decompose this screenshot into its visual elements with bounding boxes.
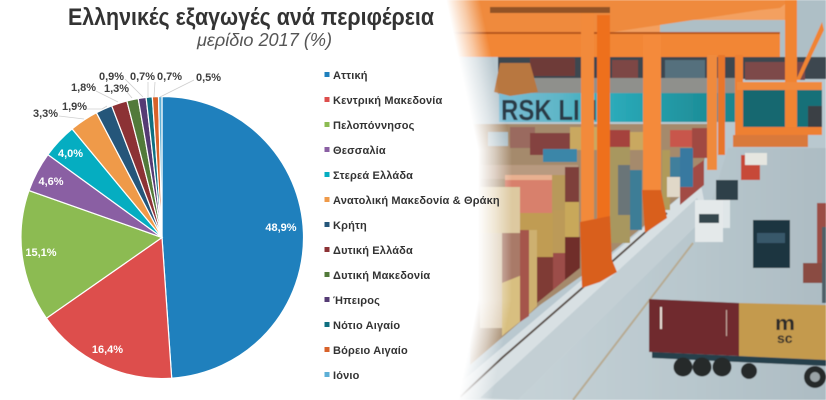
legend: Ήπειρος xyxy=(333,295,380,307)
pie labels inside: 48,9% xyxy=(265,222,297,234)
spreader xyxy=(494,63,538,96)
pie labels inside: 16,4% xyxy=(92,344,123,356)
pie labels outside: 1,9% xyxy=(62,101,87,113)
trailer with containers xyxy=(649,299,739,356)
walkway and fence xyxy=(468,187,704,400)
legend: Βόρειο Αιγαίο xyxy=(333,345,408,357)
pie labels outside: 0,5% xyxy=(196,72,221,84)
legend: Στερεά Ελλάδα xyxy=(333,170,413,182)
sky and upper frame xyxy=(614,4,786,33)
legend xyxy=(324,70,500,382)
legend: Πελοπόννησος xyxy=(333,120,415,132)
pie labels inside: 4,6% xyxy=(38,176,64,188)
ship containers xyxy=(498,57,826,79)
photo: container port with cranes and trucks: m xyxy=(775,313,795,335)
legend: Κρήτη xyxy=(333,220,367,232)
pie labels outside: 1,8% xyxy=(71,82,96,94)
title: Ελληνικές εξαγωγές ανά περιφέρεια xyxy=(68,4,434,31)
pie labels outside: 1,3% xyxy=(104,83,129,95)
legend: Ανατολική Μακεδονία & Θράκη xyxy=(333,195,500,207)
container stacks xyxy=(470,124,712,365)
pie labels inside: 15,1% xyxy=(25,247,57,259)
crane columns xyxy=(581,13,594,228)
pie labels outside: 0,9% xyxy=(99,71,124,83)
crane beams xyxy=(430,0,790,32)
pie labels outside: 0,7% xyxy=(130,71,155,83)
legend: Δυτική Μακεδονία xyxy=(333,270,430,282)
trucks xyxy=(741,155,760,180)
ground xyxy=(518,148,826,400)
ship hull xyxy=(499,93,735,122)
pie leader lines xyxy=(59,79,194,119)
pie labels outside: 0,7% xyxy=(157,71,182,83)
pie chart: export share by region xyxy=(21,96,304,379)
legend: Νότιο Αιγαίο xyxy=(333,320,400,332)
photo: container port with cranes and trucks xyxy=(430,0,826,400)
pie labels inside xyxy=(25,148,297,356)
legend: Δυτική Ελλάδα xyxy=(333,245,413,257)
crane bases xyxy=(580,216,617,288)
legend: Αττική xyxy=(333,70,368,82)
pie labels inside: 4,0% xyxy=(58,148,83,160)
subtitle: μερίδιο 2017 (%) xyxy=(196,30,332,50)
pie labels outside: 3,3% xyxy=(33,108,58,120)
photo: container port with cranes and trucks: RSK LIN xyxy=(501,95,597,127)
pie labels outside xyxy=(33,71,221,120)
legend: Ιόνιο xyxy=(333,370,360,382)
legend: Κεντρική Μακεδονία xyxy=(333,95,443,107)
legend: Θεσσαλία xyxy=(333,145,386,157)
photo: container port with cranes and trucks: sc xyxy=(777,330,793,346)
